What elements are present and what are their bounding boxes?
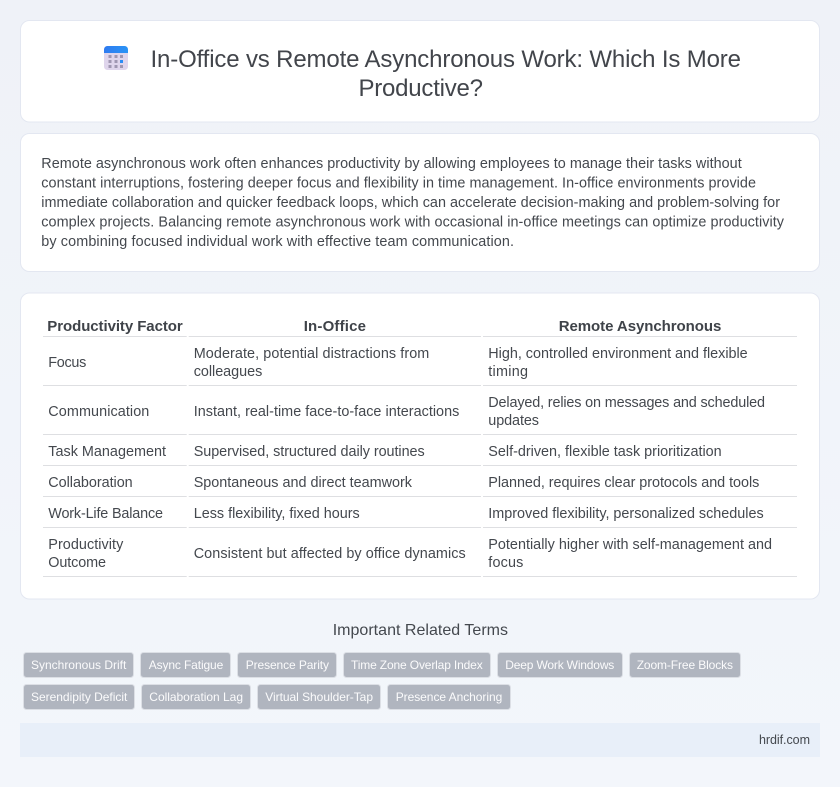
tag: Zoom-Free Blocks <box>630 652 740 678</box>
tag: Zoom-Free Blocks: Zoom-Free Blocks <box>637 658 733 672</box>
table row: Communication: updates <box>488 413 539 429</box>
panel: header <box>20 20 820 122</box>
table header row: In-Office <box>304 318 366 335</box>
tag: Deep Work Windows: Deep Work Windows <box>505 658 614 672</box>
table row: Communication: Instant, real-time face-to-face interactions <box>194 404 459 420</box>
tag: Virtual Shoulder-Tap <box>258 684 380 710</box>
icon: calendar <box>104 46 128 70</box>
tag: Deep Work Windows <box>498 652 622 678</box>
table row: Work-Life Balance <box>48 506 764 522</box>
table row: Communication: Delayed, relies on messages and scheduled <box>488 395 765 411</box>
table row: Task Management: Supervised, structured daily routines <box>194 444 425 460</box>
tag: Collaboration Lag: Collaboration Lag <box>149 690 243 704</box>
text block: summary: by combining focused individual work with effective team communication. <box>41 234 514 250</box>
title: Productive? <box>358 75 483 102</box>
panel: summary paragraph <box>20 134 820 272</box>
table row: Focus: Focus <box>48 355 86 371</box>
table row: Focus: High, controlled environment and flexible <box>488 346 748 362</box>
title <box>150 46 741 102</box>
table row: Work-Life Balance: Work-Life Balance <box>48 506 163 522</box>
table row: Collaboration: Planned, requires clear protocols and tools <box>488 475 759 491</box>
table row: Productivity Outcome: Productivity <box>48 537 124 553</box>
text block: summary <box>41 156 785 250</box>
table header row: Productivity Factor <box>47 318 183 335</box>
table row: Productivity Outcome <box>48 537 772 571</box>
tag: Synchronous Drift <box>24 652 134 678</box>
table row: Collaboration: Spontaneous and direct teamwork <box>194 475 413 491</box>
panel: comparison table <box>20 293 820 599</box>
table row: Productivity Outcome: Outcome <box>48 555 106 571</box>
tag: Serendipity Deficit <box>24 684 134 710</box>
table row: Focus <box>48 346 748 380</box>
table row: Focus: colleagues <box>194 364 262 380</box>
tag list: related terms <box>24 652 740 710</box>
tag: Collaboration Lag <box>142 684 250 710</box>
tag: Time Zone Overlap Index: Time Zone Overlap Index <box>351 658 483 672</box>
table row: Collaboration <box>48 475 759 491</box>
table row: Communication: Communication <box>48 404 149 420</box>
heading: Important Related Terms: Important Related Terms <box>333 622 508 639</box>
table row: Collaboration: Collaboration <box>48 475 133 491</box>
table row: Focus: timing <box>488 364 528 380</box>
tag: Async Fatigue: Async Fatigue <box>149 658 224 672</box>
table row: Focus: Moderate, potential distractions from <box>194 346 429 362</box>
table row: Productivity Outcome: focus <box>488 555 523 571</box>
text block: summary: constant interruptions, fostering deeper focus and flexibility in time management. In-office environments provide <box>41 175 756 191</box>
table row: Productivity Outcome: Potentially higher with self-management and <box>488 537 772 553</box>
text block: summary: immediate collaboration and quicker feedback loops, which can accelerate decision-making and problem-solving for <box>41 195 780 211</box>
tag: Virtual Shoulder-Tap: Virtual Shoulder-Tap <box>265 690 373 704</box>
tag: Serendipity Deficit: Serendipity Deficit <box>31 690 128 704</box>
table header row: Remote Asynchronous <box>559 318 721 335</box>
table row: Work-Life Balance: Less flexibility, fixed hours <box>194 506 360 522</box>
table row: Work-Life Balance: Improved flexibility, personalized schedules <box>488 506 764 522</box>
table row: Task Management: Task Management <box>48 444 166 460</box>
table row: Task Management: Self-driven, flexible task prioritization <box>488 444 722 460</box>
title: In-Office vs Remote Asynchronous Work: Which Is More <box>150 46 741 73</box>
tag: Async Fatigue <box>140 652 230 678</box>
text block: summary: Remote asynchronous work often enhances productivity by allowing employees to manage their tasks without <box>41 156 742 172</box>
footer <box>20 723 820 757</box>
tag: Presence Anchoring <box>388 684 510 710</box>
table row: Productivity Outcome: Consistent but affected by office dynamics <box>194 546 466 562</box>
tag: Presence Parity <box>238 652 336 678</box>
table row: Task Management <box>48 444 722 460</box>
table header row <box>47 318 721 335</box>
footer: hrdif.com <box>759 733 810 747</box>
text block: summary: complex projects. Balancing remote asynchronous work with occasional in-office meetings can optimize productivity <box>41 214 785 230</box>
tag: Presence Parity: Presence Parity <box>246 658 329 672</box>
table row: Communication <box>48 395 765 429</box>
tag: Presence Anchoring: Presence Anchoring <box>396 690 502 704</box>
tag: Synchronous Drift: Synchronous Drift <box>31 658 127 672</box>
tag: Time Zone Overlap Index <box>344 652 490 678</box>
